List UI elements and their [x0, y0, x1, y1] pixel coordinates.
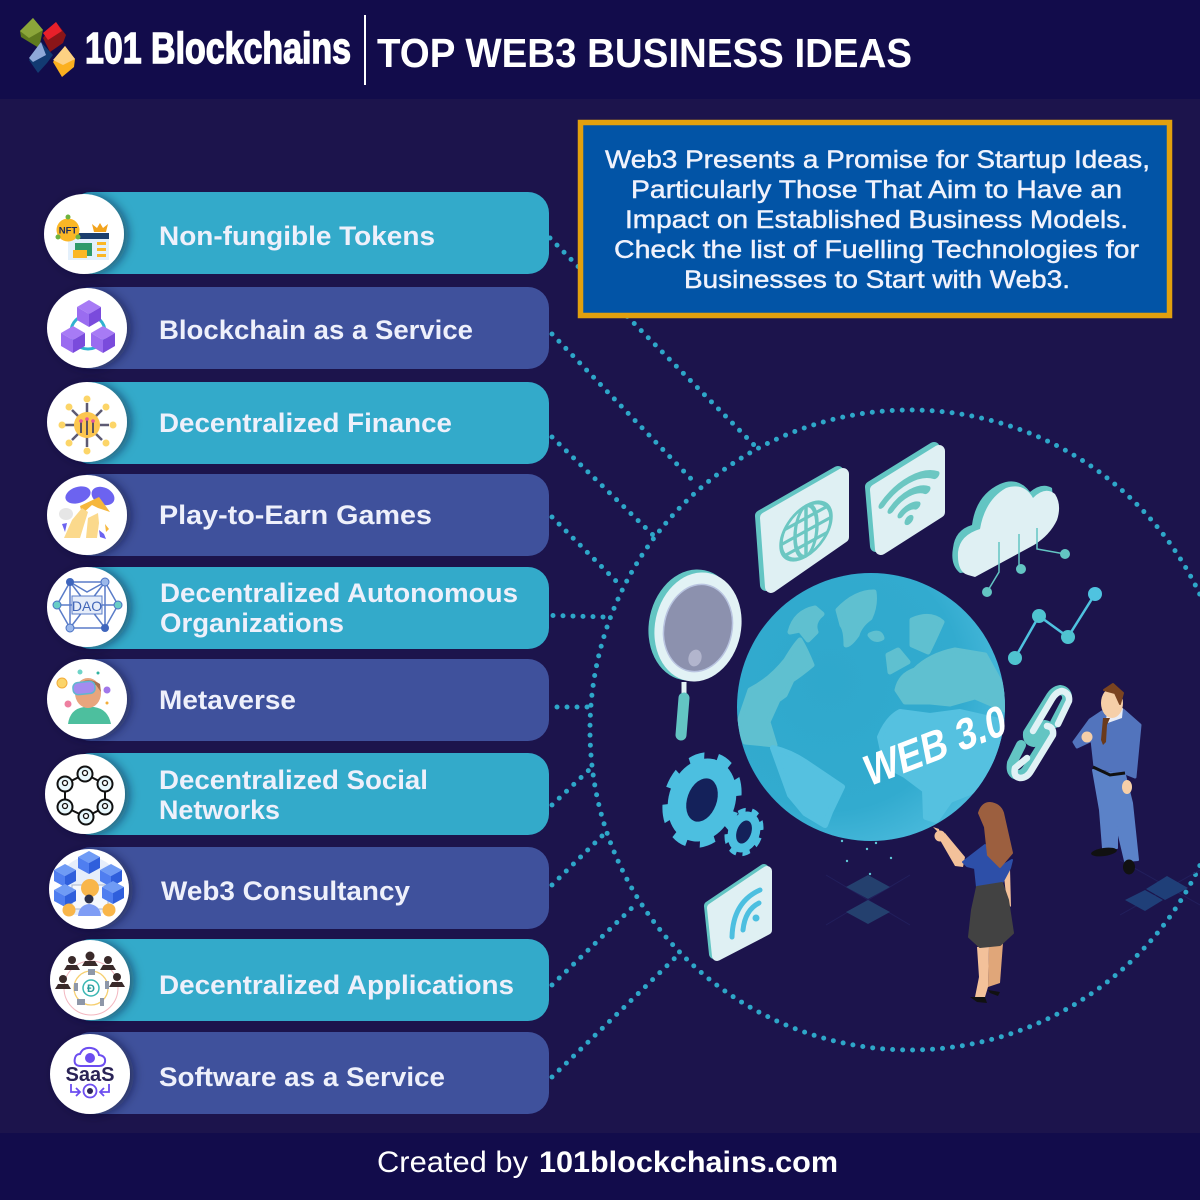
- item: Software as a Service: [50, 1032, 549, 1114]
- item: Decentralized Autonomous Organizations: Decentralized Autonomous: [160, 578, 518, 608]
- footer band: [0, 1133, 1200, 1200]
- logo: 101 Blockchains: 101 Blockchains: [85, 24, 351, 73]
- intro callout: Impact on Established Business Models.: [625, 206, 1128, 234]
- icon: logo cubes: [20, 18, 75, 77]
- item: Play-to-Earn Games: Play-to-Earn Games: [159, 500, 432, 530]
- icon: magnifier: [638, 561, 751, 735]
- icon: NFT: [56, 214, 109, 260]
- figure: woman: [933, 803, 1013, 1003]
- item: Web3 Consultancy: [49, 847, 549, 929]
- icon: decentralized finance: [58, 396, 116, 454]
- intro callout: Businesses to Start with Web3.: [684, 266, 1070, 294]
- illustration: Web 3.0 scene: [638, 448, 1200, 1003]
- icon: DAO network: DAO: [72, 598, 102, 614]
- header band: [0, 0, 1200, 99]
- icon: SaaS: [66, 1048, 114, 1098]
- item: Decentralized Finance: [47, 382, 549, 464]
- intro callout: [580, 122, 1170, 316]
- icon: dApps: Đ: [87, 983, 95, 995]
- icon: blockchain cubes: [61, 300, 115, 353]
- item: Decentralized Finance: Decentralized Finance: [159, 408, 452, 438]
- footer credit: [377, 1146, 838, 1179]
- item: Decentralized Applications: Decentralized Applications: [159, 970, 514, 1000]
- icon: wifi tile: [709, 869, 767, 956]
- footer credit: Created by: [377, 1146, 528, 1179]
- icon: globe card: [761, 472, 843, 587]
- intro callout: Web3 Presents a Promise for Startup Ideas,: [605, 146, 1150, 174]
- item: Blockchain as a Service: Blockchain as a Service: [159, 315, 473, 345]
- footer credit: 101blockchains.com: [539, 1146, 838, 1179]
- item: Decentralized Autonomous Organizations: Organizations: [160, 608, 344, 638]
- icon: play to earn: [59, 483, 117, 539]
- globe: [737, 573, 1010, 875]
- item: Decentralized Social Networks: Networks: [159, 795, 280, 825]
- icon: dApps: [55, 952, 125, 1015]
- icon: metaverse avatar: [57, 670, 111, 724]
- item: Decentralized Social Networks: [45, 753, 549, 835]
- figure: man: [1074, 684, 1140, 874]
- icon: cloud: [952, 481, 1070, 597]
- icon: consultancy: [54, 851, 124, 916]
- item: Metaverse: Metaverse: [159, 685, 296, 715]
- item: Blockchain as a Service: [47, 287, 549, 369]
- icon: chain link: [1012, 690, 1069, 778]
- intro callout: Check the list of Fuelling Technologies for: [614, 236, 1139, 264]
- icon: line chart: [1008, 587, 1102, 665]
- item: Decentralized Social Networks: Decentralized Social: [159, 765, 428, 795]
- item: Play-to-Earn Games: [47, 474, 549, 556]
- icon: DAO network: [53, 578, 122, 632]
- item: Decentralized Applications: [50, 939, 549, 1021]
- icon: social network: [58, 766, 112, 824]
- icon: gears: [655, 747, 767, 858]
- label: WEB 3.0: WEB 3.0: [861, 696, 1010, 797]
- item: Non-fungible Tokens: [44, 192, 549, 274]
- floor tiles: [826, 860, 1200, 925]
- item: Web3 Consultancy: Web3 Consultancy: [161, 876, 410, 906]
- item: Decentralized Autonomous Organizations: [47, 567, 549, 649]
- logo: 101 Blockchains: [20, 18, 351, 77]
- item: Metaverse: [47, 659, 549, 741]
- item: Software as a Service: Software as a Service: [159, 1062, 445, 1092]
- item: Non-fungible Tokens: Non-fungible Tokens: [159, 221, 435, 251]
- icon: NFT: NFT: [59, 226, 77, 236]
- dots below globe: [841, 840, 892, 875]
- title: TOP WEB3 BUSINESS IDEAS: [377, 30, 912, 76]
- dotted connectors: [550, 238, 1200, 1077]
- icon: SaaS: SaaS: [66, 1064, 114, 1086]
- icon: wifi card: [871, 448, 939, 549]
- intro callout: Particularly Those That Aim to Have an: [631, 176, 1122, 204]
